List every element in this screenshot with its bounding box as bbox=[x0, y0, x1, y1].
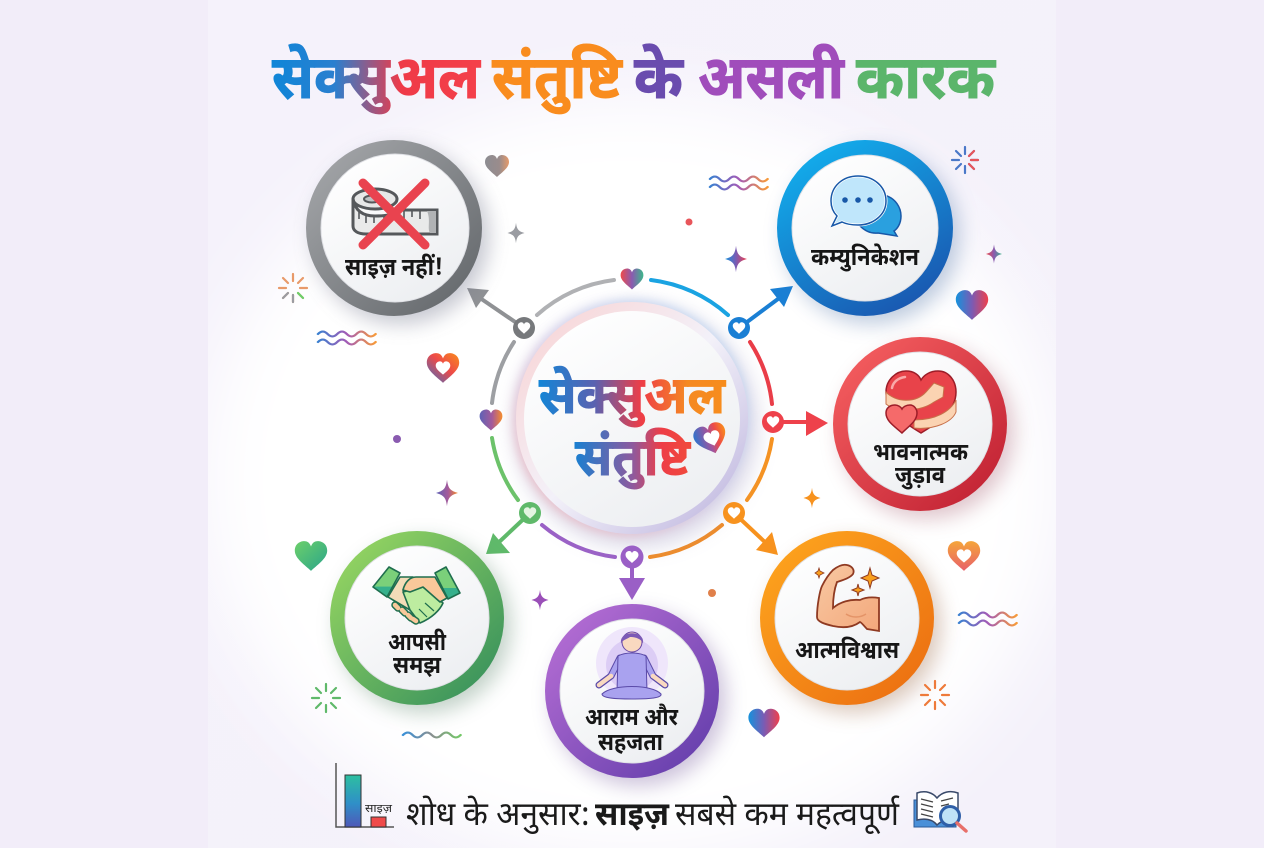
footer statement: शोध के अनुसार: bbox=[406, 794, 590, 839]
connector: orange bbox=[723, 502, 778, 555]
connector: purple bbox=[619, 546, 645, 600]
arc: grey top bbox=[537, 280, 614, 315]
arc: orange bottom bbox=[650, 525, 722, 557]
panel: relaxation bbox=[545, 604, 726, 786]
label: line 2: जुड़ाव bbox=[895, 461, 945, 493]
decoration: hearts bbox=[295, 155, 988, 737]
icon: book and magnifier bbox=[914, 792, 966, 831]
icon: crossed tape measure bbox=[353, 183, 437, 245]
central title: सेक्सुअल bbox=[539, 366, 727, 435]
footer statement: सबसे कम महत्वपूर्ण bbox=[675, 794, 900, 839]
label: line 2: सहजता bbox=[598, 728, 664, 760]
connector: red bbox=[762, 411, 828, 436]
panel: confidence bbox=[760, 531, 941, 713]
connector: grey bbox=[467, 288, 535, 339]
title: सेक्सुअल bbox=[272, 45, 482, 123]
central disc bbox=[513, 300, 758, 548]
background bbox=[208, 80, 1056, 848]
title: के bbox=[634, 45, 684, 123]
central disc: संतुष्टि bbox=[575, 429, 692, 497]
label: line 2: समझ bbox=[393, 651, 441, 683]
icon: central heart bbox=[691, 420, 731, 458]
panel: communication bbox=[777, 140, 960, 324]
arc: purple bbox=[542, 525, 615, 557]
label: line 1: आराम और bbox=[585, 703, 678, 735]
label: line 1: आपसी bbox=[388, 628, 447, 660]
label: कम्युनिकेशन bbox=[811, 243, 920, 275]
central connector ring with arrows bbox=[492, 280, 772, 557]
label: line 1: भावनात्मक bbox=[873, 438, 969, 470]
icon: meditating person bbox=[596, 627, 668, 699]
label: आत्मविश्वास bbox=[795, 636, 900, 668]
panel: size not bbox=[306, 140, 489, 324]
arc: blue bbox=[651, 280, 728, 315]
ring heart left bbox=[480, 410, 502, 430]
connector: blue bbox=[728, 286, 793, 339]
title bbox=[272, 45, 996, 123]
footer statement: साइज़ bbox=[595, 796, 670, 839]
decoration: sparkles bbox=[393, 218, 1002, 610]
title: कारक bbox=[856, 45, 996, 123]
arc: orange right bbox=[747, 439, 772, 500]
connector: green bbox=[486, 502, 541, 554]
icon: hugged heart bbox=[886, 371, 956, 433]
icon: flexed arm bbox=[815, 565, 879, 631]
footer bar chart bbox=[336, 763, 394, 827]
panel: mutual understanding bbox=[330, 531, 511, 713]
decoration: squiggles bbox=[318, 177, 1017, 737]
decoration: bursts bbox=[279, 147, 978, 712]
panel: emotional bond bbox=[833, 337, 1014, 519]
title: संतुष्टि bbox=[492, 45, 624, 123]
ring heart top bbox=[621, 269, 643, 289]
arc: red bbox=[750, 342, 772, 404]
title: असली bbox=[698, 45, 845, 123]
footer statement bbox=[406, 794, 900, 839]
arc: green bbox=[492, 438, 518, 500]
icon: handshake bbox=[373, 567, 460, 623]
chart label: साइज़ bbox=[365, 803, 393, 817]
icon: chat bubbles bbox=[831, 176, 901, 236]
arc: grey left bbox=[492, 342, 514, 403]
label: साइज़ नहीं! bbox=[345, 253, 443, 285]
